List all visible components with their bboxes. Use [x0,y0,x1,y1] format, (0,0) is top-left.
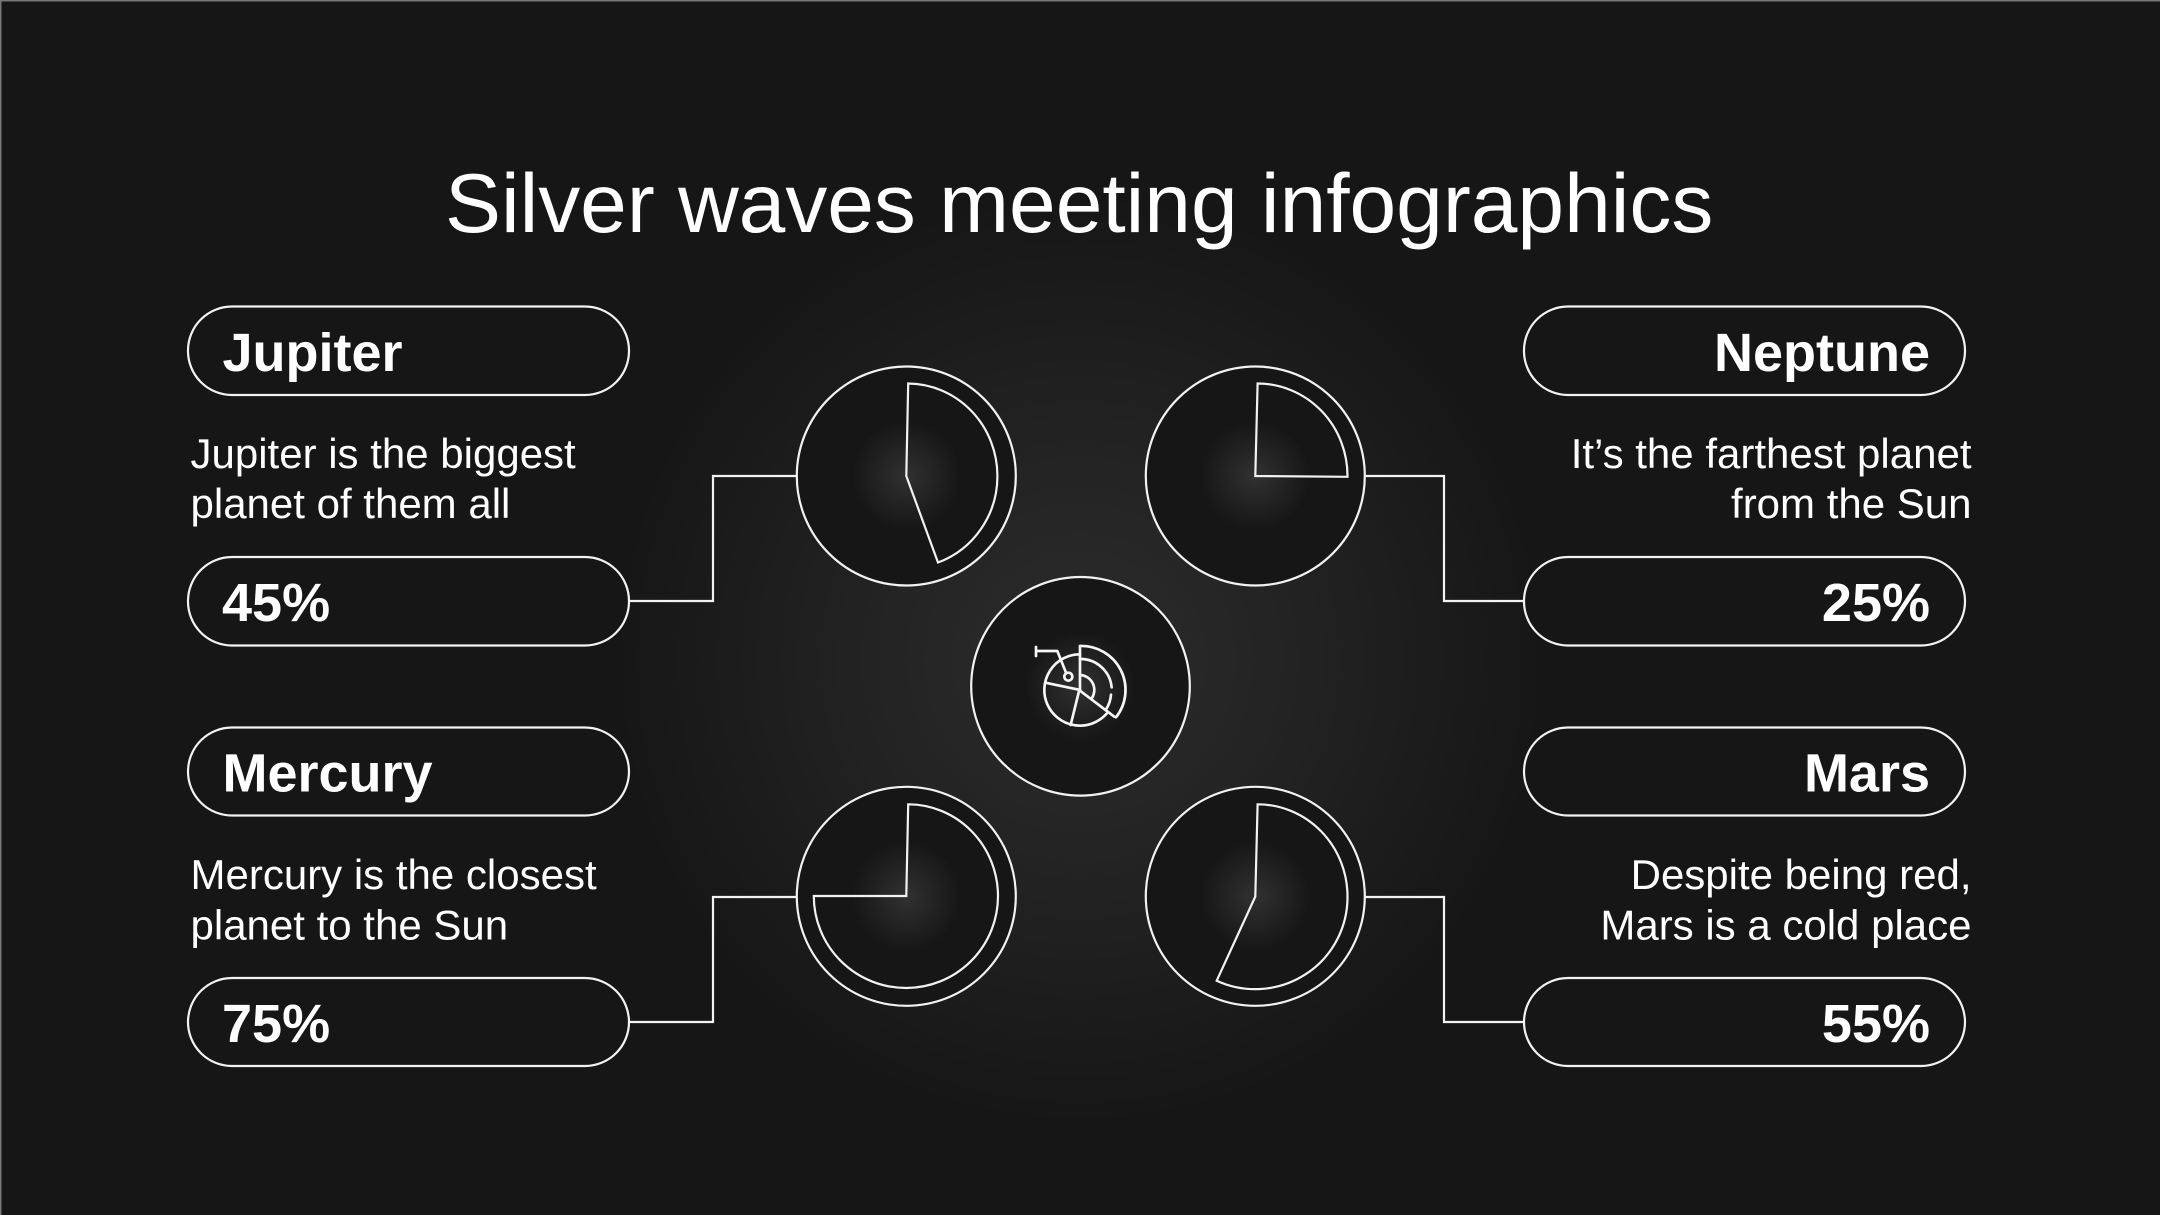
value pill: 55% [1524,978,1965,1066]
heading pill: Jupiter [188,306,629,395]
heading: Mars: Mars [1804,744,1930,804]
text: Jupiter description: planet of them all [190,480,510,527]
panel: Neptune [1146,306,1972,646]
value pill: 45% [188,557,629,646]
pie chart: 55% [1146,787,1365,1006]
icon: radar pie chart [1036,646,1126,726]
value: 75%: 75% [222,994,330,1054]
panel: Mars [1146,728,1972,1066]
heading pill: Mercury [188,728,629,816]
text: Neptune description: It’s the farthest planet [1571,430,1972,477]
text: Jupiter description: Jupiter is the biggest [190,430,576,477]
title: Silver waves meeting infographics [445,156,1713,250]
value: 25%: 25% [1822,573,1930,633]
value pill: 75% [188,978,629,1066]
heading: Jupiter: Jupiter [222,323,403,383]
panel: Jupiter [188,306,1016,646]
center circle [971,577,1190,796]
connector: Jupiter [628,476,797,601]
connector: Mercury [628,897,797,1022]
value pill: 25% [1524,557,1965,646]
text: Mars description: Despite being red, [1631,851,1972,898]
heading pill: Mars [1524,728,1965,816]
text: Mercury description: Mercury is the closest [190,851,597,898]
text: Mercury description: planet to the Sun [190,902,508,948]
heading: Neptune: Neptune [1714,323,1930,383]
connector: Neptune [1364,476,1524,601]
text: Mars description: Mars is a cold place [1600,902,1972,948]
heading pill: Neptune [1524,306,1965,395]
pie chart: 75% [797,787,1016,1006]
text: Neptune description: from the Sun [1731,480,1972,527]
heading: Mercury: Mercury [222,744,433,804]
pie chart: 45% [797,366,1016,586]
value: 55%: 55% [1822,994,1930,1054]
panel: Mercury [188,728,1016,1066]
connector: Mars [1364,897,1524,1022]
value: 45%: 45% [222,573,330,633]
pie chart: 25% [1146,366,1365,586]
